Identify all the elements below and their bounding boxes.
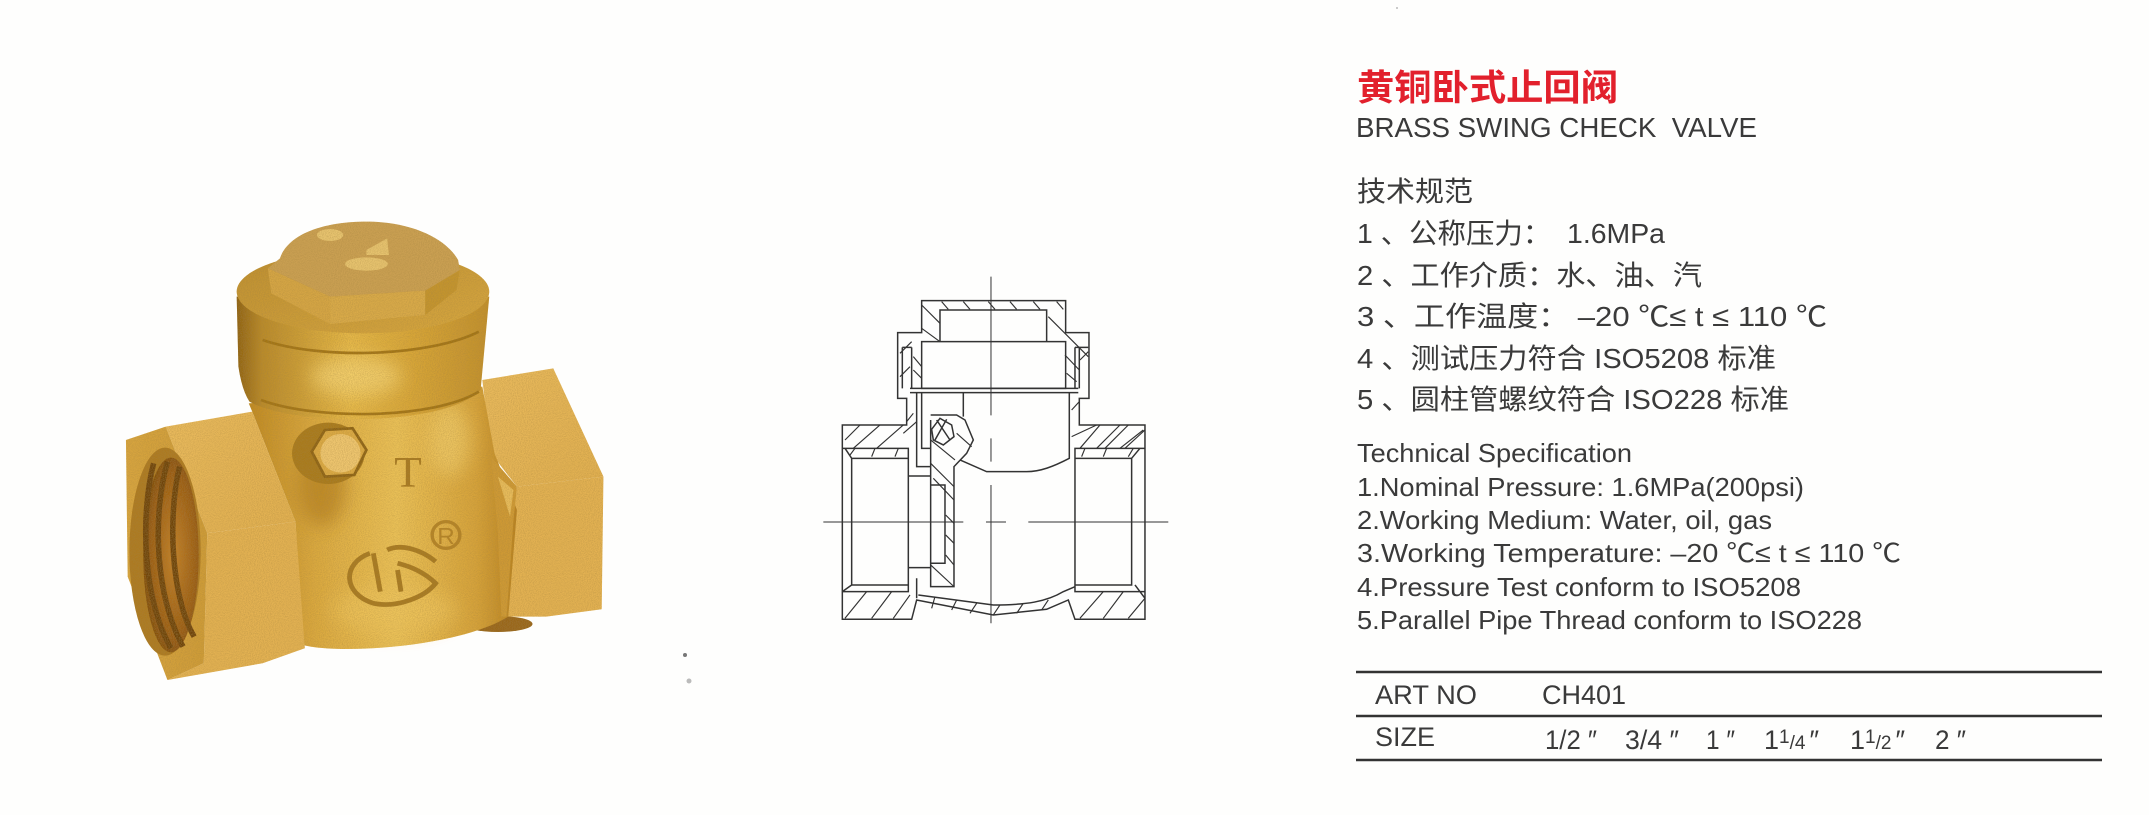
outer contour bbox=[842, 301, 1145, 619]
registered mark bbox=[432, 522, 460, 550]
gasket and seat bbox=[902, 347, 1088, 393]
item 5: 5.Parallel Pipe Thread conform to ISO228 bbox=[1357, 605, 1862, 635]
section hatching bbox=[845, 302, 1145, 618]
port threads bbox=[842, 448, 1145, 598]
cap highlight bbox=[311, 357, 401, 397]
left hex end bbox=[126, 412, 305, 680]
Chinese specification block bbox=[1357, 176, 1827, 415]
bonnet cavity bbox=[922, 310, 1066, 388]
size row: 1/2 ″ bbox=[1545, 725, 1597, 755]
spec 2: 2 、工作介质：水、油、汽 bbox=[1357, 260, 1702, 291]
product photo: brass swing check valve bbox=[126, 222, 603, 680]
embossed marks on plug bbox=[317, 229, 389, 271]
valve body bbox=[249, 387, 517, 649]
product size table bbox=[1356, 672, 2102, 760]
size row: /4 bbox=[1790, 733, 1806, 754]
Chinese title: 黄铜卧式止回阀 bbox=[1357, 67, 1618, 108]
Chinese spec heading: 技术规范 bbox=[1357, 176, 1473, 207]
size row: /2 bbox=[1876, 733, 1891, 754]
English title: BRASS SWING CHECK VALVE bbox=[1356, 112, 1757, 143]
cap cylinder bbox=[237, 297, 489, 419]
body inner wall bbox=[908, 393, 1075, 605]
hex plug bbox=[268, 222, 460, 324]
item 2: 2.Working Medium: Water, oil, gas bbox=[1357, 505, 1772, 535]
size row: 1 ″ bbox=[1706, 725, 1735, 755]
item 4: 4.Pressure Test conform to ISO5208 bbox=[1357, 572, 1801, 602]
cross-section technical drawing bbox=[823, 277, 1168, 623]
art no row: CH401 bbox=[1542, 680, 1626, 710]
spec 5: 5 、圆柱管螺纹符合 ISO228 标准 bbox=[1357, 384, 1789, 415]
hinge pin bbox=[932, 418, 954, 445]
size row: SIZE bbox=[1375, 722, 1435, 752]
threaded port bbox=[129, 448, 201, 656]
size row: 2 ″ bbox=[1935, 725, 1966, 755]
English specification block bbox=[1357, 438, 1901, 635]
embossed T mark: T bbox=[394, 448, 422, 496]
spec 3: 3 、工作温度： –20 ℃≤ t ≤ 110 ℃ bbox=[1357, 301, 1827, 332]
size row: 1 bbox=[1865, 727, 1876, 748]
side bolt bbox=[292, 423, 366, 484]
art no row: ART NO bbox=[1375, 680, 1477, 710]
size row: 1 bbox=[1764, 725, 1779, 755]
body shading bbox=[297, 403, 517, 633]
cap top plate bbox=[237, 250, 489, 333]
art no row bbox=[1375, 680, 1626, 710]
size row: 1 bbox=[1779, 727, 1790, 748]
registered mark: R bbox=[437, 523, 455, 550]
item 1: 1.Nominal Pressure: 1.6MPa(200psi) bbox=[1357, 472, 1804, 502]
size row: ″ bbox=[1895, 725, 1905, 755]
centre lines bbox=[823, 277, 1168, 623]
spec 1: 1 、公称压力： 1.6MPa bbox=[1357, 218, 1665, 249]
right hex end bbox=[463, 368, 603, 632]
size row bbox=[1375, 722, 1966, 755]
English spec heading: Technical Specification bbox=[1357, 438, 1632, 468]
swing disc bbox=[931, 415, 973, 587]
brand logo bbox=[350, 547, 436, 604]
size row: 1 bbox=[1850, 725, 1865, 755]
size row: ″ bbox=[1809, 725, 1819, 755]
size row: 3/4 ″ bbox=[1625, 725, 1679, 755]
item 3: 3.Working Temperature: –20 ℃≤ t ≤ 110 ℃ bbox=[1357, 538, 1901, 568]
spec 4: 4 、测试压力符合 ISO5208 标准 bbox=[1357, 343, 1776, 374]
